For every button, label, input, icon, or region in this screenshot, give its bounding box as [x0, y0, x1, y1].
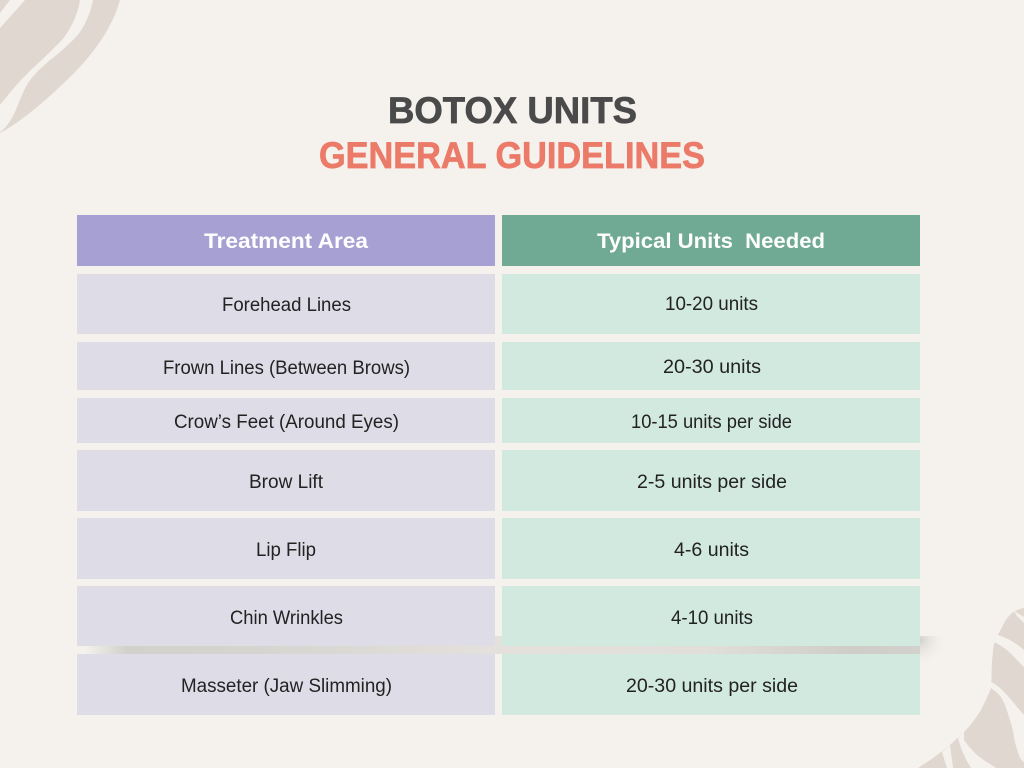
row: Masseter — [77, 654, 920, 715]
row: Frown Lines — [77, 342, 920, 390]
row: Crow's Feet — [77, 398, 920, 443]
row: Crow's Feet: 10-15 units per side — [631, 412, 792, 433]
row: Crow's Feet: Crow’s Feet (Around Eyes) — [174, 412, 399, 433]
row: Frown Lines: Frown Lines (Between Brows) — [163, 358, 410, 379]
header: Treatment Area — [77, 215, 495, 266]
title — [319, 90, 705, 176]
row: Lip Flip: Lip Flip — [256, 540, 316, 561]
row: Lip Flip: 4-6 units — [674, 540, 749, 561]
shadow under chin wrinkles row — [85, 636, 948, 668]
row: Brow Lift: Brow Lift — [249, 472, 324, 493]
title line: General Guidelines: GENERAL GUIDELINES — [319, 135, 705, 176]
row: Masseter: 20-30 units per side — [626, 676, 798, 697]
title line: Botox Units: BOTOX UNITS — [388, 90, 637, 131]
row: Chin Wrinkles: Chin Wrinkles — [230, 608, 343, 629]
decoration: top-left leaf — [0, 0, 120, 133]
header: Typical Units Needed: Typical Units Needed — [597, 230, 825, 253]
decoration: bottom-right leaf — [918, 608, 1024, 768]
row: Brow Lift — [77, 450, 920, 511]
row: Lip Flip — [77, 518, 920, 579]
row: Forehead Lines: Forehead Lines — [222, 295, 351, 316]
row: Masseter: Masseter (Jaw Slimming) — [181, 676, 392, 697]
row: Forehead Lines — [77, 274, 920, 334]
row: Forehead Lines: 10-20 units — [665, 294, 758, 315]
row: Frown Lines: 20-30 units — [663, 357, 761, 378]
row: Chin Wrinkles: 4-10 units — [671, 608, 753, 629]
row: Brow Lift: 2-5 units per side — [637, 472, 787, 493]
header: Treatment Area: Treatment Area — [204, 230, 368, 253]
row: Chin Wrinkles — [77, 586, 920, 646]
table — [77, 215, 920, 715]
header: Typical Units Needed — [502, 215, 920, 266]
